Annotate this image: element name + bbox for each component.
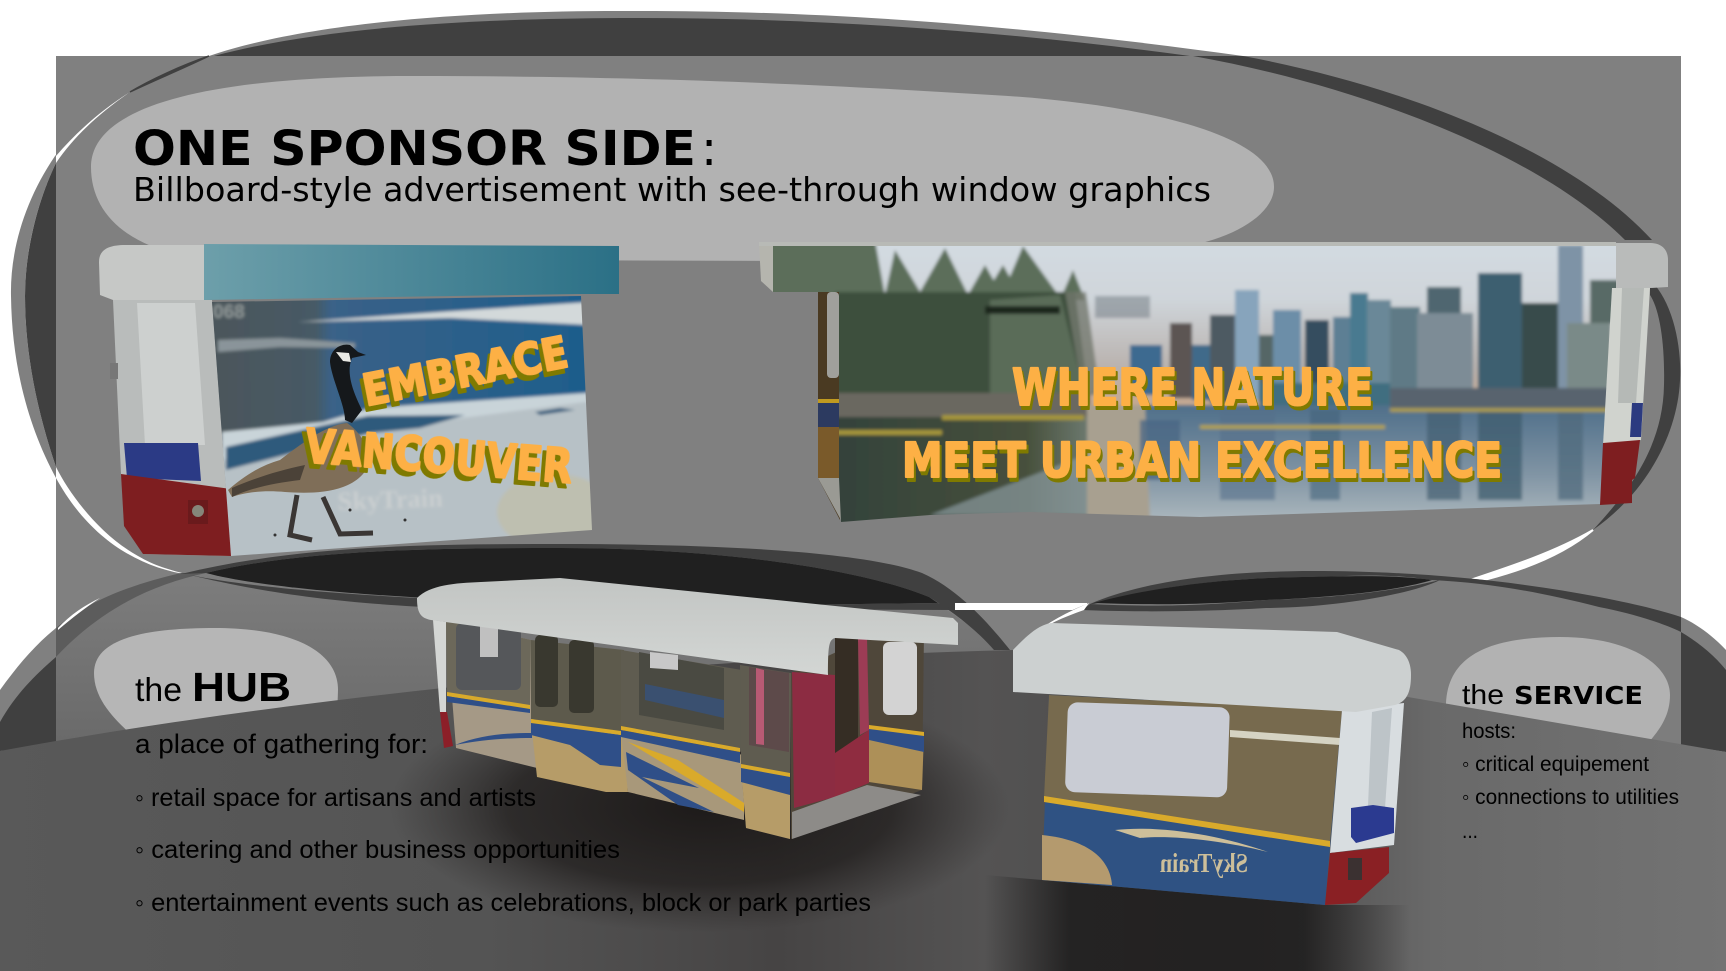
text: vancouver: VANCOUVER [303,419,575,495]
text block: the hub: ◦ catering and other business opportunities [135,836,620,864]
train: right sponsor side [759,240,1668,530]
car side [1042,695,1342,905]
roof end [1616,243,1668,290]
background panel [56,56,1681,776]
roof [99,245,204,300]
text: where nature: WHERE NATURE [1012,359,1373,418]
train: hub module [417,578,958,839]
text block: the service: ◦ critical equipement [1462,753,1649,776]
subheading: Billboard-style advertisement with see-through window graphics [133,170,1211,209]
poster: embrace vancouver [212,296,592,556]
end cap [1330,703,1404,853]
panorama poster [760,240,1630,530]
callout: one sponsor side [91,76,1274,262]
callout: the hub [94,628,338,740]
train: service module [1013,623,1411,905]
text block: the service [1462,679,1679,843]
text block: the service: SERVICE [1514,681,1643,710]
car interior end [791,633,924,839]
text block: the hub: the [135,671,182,708]
text block: the service: hosts: [1462,720,1516,743]
top blob outline [11,11,1680,590]
end body [113,300,231,556]
heading: : [701,121,717,177]
roof [1013,623,1411,712]
text block: the hub: HUB [192,664,291,710]
text block: the hub: ◦ retail space for artisans and artists [135,784,536,812]
end body [1603,288,1650,445]
icon: canada goose [228,345,482,540]
floor [0,650,1726,971]
service blob [1013,571,1726,760]
poster: embrace vancouver: SkyTrain [337,483,444,516]
text: embrace: EMBRACE [358,327,572,417]
car side [433,620,791,839]
callout: the service [1446,637,1670,750]
roof [417,578,958,675]
text block: the hub [135,664,871,917]
heading [133,121,1211,209]
text block: the service: ◦ connections to utilities [1462,786,1679,809]
skytrain mirrored logo: SkyTrain [1160,848,1248,878]
text block: the hub: ◦ entertainment events such as celebrations, block or park parties [135,889,871,917]
hub blob [0,544,1087,760]
text block: the hub: a place of gathering for: [135,729,428,759]
heading: ONE SPONSOR SIDE [133,121,696,177]
text block: the service: ... [1462,820,1478,843]
left car edge [818,292,840,520]
train: left sponsor end [99,244,619,560]
text block: the service: the [1462,679,1504,710]
poster: embrace vancouver: 068 [213,302,245,323]
text: meet urban excellence: MEET URBAN EXCELLENCE [902,433,1502,489]
floor shadows and reflections [390,690,1410,971]
